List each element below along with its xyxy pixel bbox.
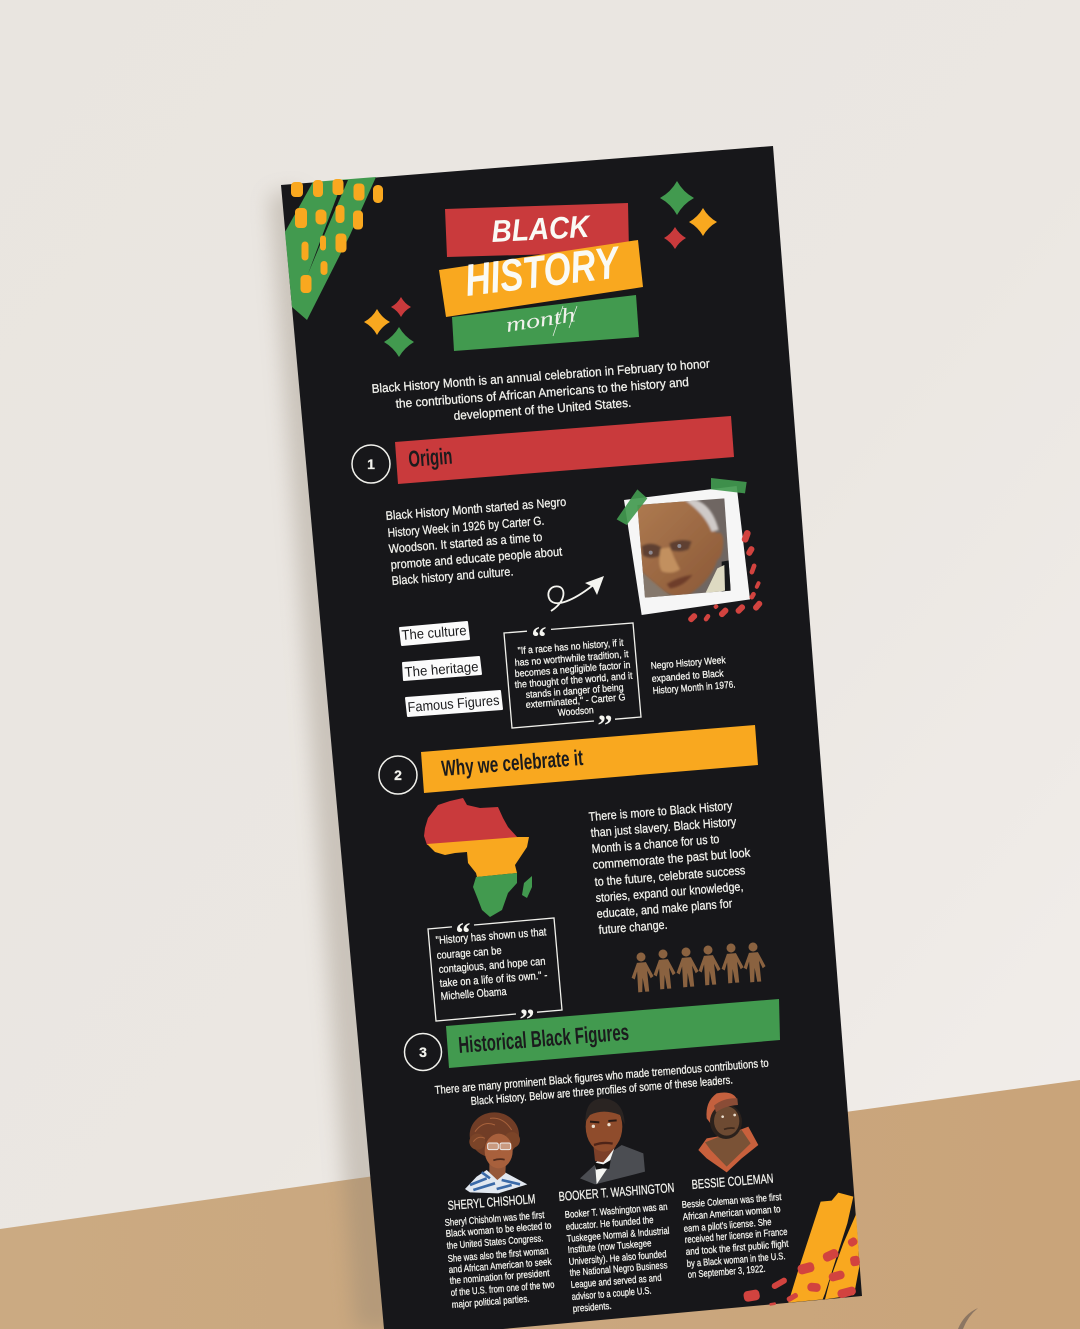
- side note: Negro History Week: History Month in 1976.: [652, 680, 736, 697]
- poster background: [281, 146, 862, 1329]
- section 3 intro text: Black History. Below are three profiles of some of these leaders.: [470, 1074, 733, 1108]
- title block: BLACK: [491, 209, 593, 249]
- quote box: Michelle Obama: ”: [520, 1003, 534, 1036]
- quote box: Carter G. Woodson: "If a race has no history, if it: [517, 638, 624, 657]
- why we celebrate paragraph: stories, expand our knowledge,: [595, 879, 744, 905]
- poster shadow: [270, 190, 400, 1329]
- origin paragraph: [385, 495, 567, 588]
- quote box: Michelle Obama: Michelle Obama: [440, 986, 508, 1003]
- shadow mark on table: [958, 1308, 978, 1329]
- profile text: Bessie Coleman: and took the first public flight: [685, 1239, 789, 1258]
- origin paragraph: Woodson. It started as a time to: [388, 530, 543, 556]
- profile text: Bessie Coleman: African American woman to: [682, 1204, 781, 1223]
- quote box: Carter G. Woodson: Woodson: [557, 705, 594, 719]
- why we celebrate paragraph: [588, 799, 752, 937]
- decoration: red dashes around the photo: [687, 529, 763, 623]
- profile text: Booker T. Washington: Institute (now Tuskegee: [567, 1238, 652, 1256]
- portrait: Sheryl Chisholm: [465, 1112, 527, 1193]
- why we celebrate paragraph: than just slavery. Black History: [590, 815, 738, 840]
- origin paragraph: History Week in 1926 by Carter G.: [387, 514, 545, 540]
- decoration: sparkle stars left of title: [364, 297, 414, 357]
- why we celebrate paragraph: future change.: [598, 918, 668, 937]
- section 1 heading: Origin: [352, 416, 734, 484]
- side note: Negro History Week: [650, 655, 736, 697]
- decoration: green brush corner with yellow dots: [285, 177, 383, 320]
- section 2 heading: Why we celebrate it: [379, 725, 758, 794]
- intro text: development of the United States.: [453, 396, 632, 423]
- quote box: Carter G. Woodson: becomes a negligible factor in: [514, 660, 631, 680]
- section 3 heading: Historical Black Figures: 3: [419, 1044, 427, 1060]
- quote box: Carter G. Woodson: “: [532, 621, 546, 654]
- profile text: Sheryl Chisholm: the nomination for president: [449, 1268, 550, 1287]
- profile text: Bessie Coleman: received her license in France: [684, 1227, 788, 1246]
- arrow: [548, 576, 604, 611]
- keyword labels: The culture: [401, 622, 467, 643]
- profile names: BOOKER T. WASHINGTON: [558, 1180, 675, 1204]
- profile text: Sheryl Chisholm: major political parties.: [451, 1294, 530, 1311]
- quote box: Carter G. Woodson: has no worthwhile tradition, it: [514, 649, 629, 669]
- intro text: the contributions of African Americans to the history and: [395, 375, 689, 411]
- origin paragraph: Black history and culture.: [391, 564, 514, 588]
- section 1 heading: Origin: Origin: [407, 443, 453, 472]
- profile text: Booker T. Washington: University). He also founded: [568, 1249, 667, 1268]
- Africa map in red, yellow and green: [424, 798, 532, 917]
- quote box: Michelle Obama: courage can be: [436, 945, 502, 962]
- profile text: Booker T. Washington: advisor to a couple U.S.: [571, 1286, 652, 1303]
- why we celebrate paragraph: to the future, celebrate success: [594, 863, 746, 889]
- title block: HISTORY: [462, 236, 624, 306]
- section 3 heading: Historical Black Figures: Historical Black Figures: [457, 1019, 630, 1058]
- profile text: Booker T. Washington: Tuskegee Normal & Industrial: [566, 1226, 670, 1245]
- profile text: Booker T. Washington: the National Negro Business: [569, 1260, 668, 1279]
- profile names: BESSIE COLEMAN: [691, 1171, 774, 1192]
- profile text: Sheryl Chisholm: of the U.S. from one of the two: [450, 1280, 555, 1299]
- table surface: [0, 1080, 1080, 1329]
- profile text: Booker T. Washington: educator. He founded the: [565, 1215, 654, 1233]
- profile text: Booker T. Washington: Booker T. Washington was an: [564, 1202, 668, 1221]
- profile names: [447, 1171, 774, 1213]
- title block: month: [504, 302, 577, 337]
- profile text: Bessie Coleman: on September 3, 1922.: [687, 1264, 766, 1281]
- profile text: Booker T. Washington: [564, 1202, 670, 1315]
- profile text: Bessie Coleman: earn a pilot's license. She: [683, 1217, 772, 1235]
- portrait: Bessie Coleman: [698, 1092, 758, 1172]
- side note: Negro History Week: Negro History Week: [650, 655, 726, 672]
- quote box: Michelle Obama: "History has shown us that: [435, 926, 547, 947]
- section 3 intro text: [434, 1058, 769, 1108]
- quote box: Michelle Obama: contagious, and hope can: [438, 956, 546, 976]
- keyword labels: [400, 622, 502, 716]
- photo: Carter G. Woodson with tape: [617, 478, 750, 615]
- section 2 heading: Why we celebrate it: 2: [394, 767, 402, 783]
- profile text: Sheryl Chisholm: Sheryl Chisholm was the first: [444, 1210, 545, 1229]
- quote box: Carter G. Woodson: exterminated," - Carter G: [525, 692, 626, 711]
- quote box: Michelle Obama: [428, 917, 562, 1036]
- intro text: Black History Month is an annual celebration in February to honor: [371, 357, 710, 396]
- origin paragraph: Black History Month started as Negro: [385, 495, 567, 523]
- profile text: Bessie Coleman: by a Black woman in the U.S.: [686, 1251, 786, 1270]
- why we celebrate paragraph: educate, and make plans for: [596, 896, 733, 921]
- section 3 intro text: There are many prominent Black figures who made tremendous contributions to: [434, 1058, 769, 1097]
- section 1 heading: Origin: 1: [367, 456, 375, 472]
- profile text: Sheryl Chisholm: the United States Congress.: [446, 1233, 544, 1252]
- icon: row of six people: [630, 942, 767, 993]
- profile text: Sheryl Chisholm: [444, 1210, 555, 1311]
- origin paragraph: promote and educate people about: [390, 544, 563, 572]
- intro text: [371, 357, 710, 423]
- profile text: Booker T. Washington: League and served as and: [570, 1273, 662, 1291]
- keyword labels: Famous Figures: [407, 692, 500, 715]
- profile text: Sheryl Chisholm: She was also the first woman: [447, 1246, 549, 1265]
- why we celebrate paragraph: commemorate the past but look: [592, 846, 752, 872]
- quote box: Carter G. Woodson: stands in danger of being: [525, 682, 624, 701]
- decoration: yellow brush corner with red dashes: [743, 1193, 860, 1306]
- why we celebrate paragraph: There is more to Black History: [588, 799, 734, 824]
- decoration: sparkle stars top right: [660, 181, 717, 249]
- portrait: Booker T. Washington: [580, 1098, 645, 1184]
- profile names: SHERYL CHISHOLM: [447, 1191, 536, 1213]
- profile text: Bessie Coleman: [681, 1192, 789, 1281]
- why we celebrate paragraph: Month is a chance for us to: [591, 832, 720, 856]
- quote box: Michelle Obama: take on a life of its own." -: [439, 970, 548, 990]
- profile text: Booker T. Washington: presidents.: [572, 1301, 612, 1315]
- quote box: Carter G. Woodson: the thought of the world, and it: [514, 671, 633, 691]
- profile text: Bessie Coleman: Bessie Coleman was the first: [681, 1192, 782, 1211]
- quote box: Michelle Obama: “: [456, 917, 470, 950]
- profile text: Sheryl Chisholm: Black woman to be elected to: [445, 1220, 552, 1240]
- profile text: Sheryl Chisholm: and African American to seek: [448, 1257, 552, 1276]
- section 3 heading: Historical Black Figures: [404, 999, 780, 1070]
- section 2 heading: Why we celebrate it: Why we celebrate it: [440, 745, 584, 781]
- title block: [439, 203, 643, 351]
- keyword labels: The heritage: [404, 658, 479, 680]
- quote box: Carter G. Woodson: [504, 621, 641, 742]
- quote box: Carter G. Woodson: ”: [598, 709, 612, 742]
- side note: Negro History Week: expanded to Black: [651, 668, 724, 685]
